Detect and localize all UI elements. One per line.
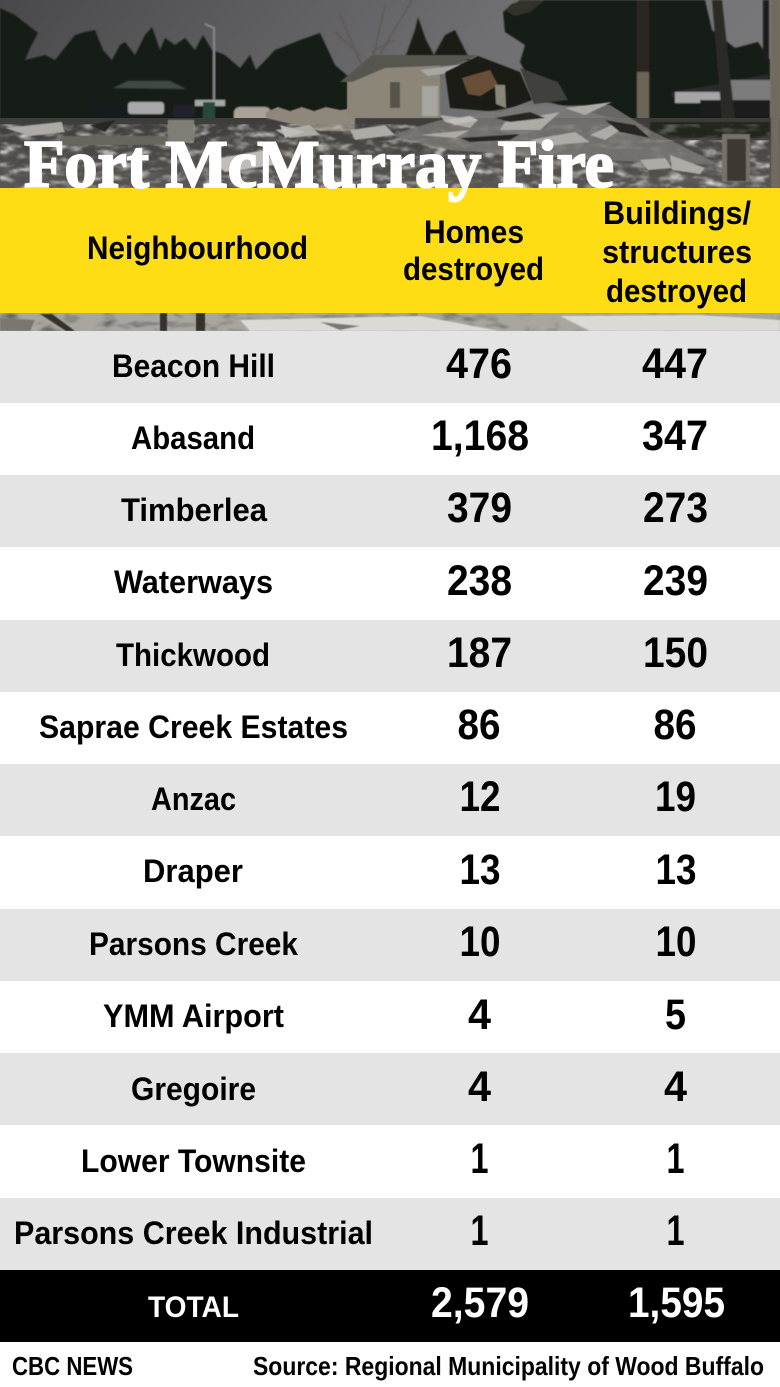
row: Parsons Creek Industrial: 1 (470, 1207, 488, 1255)
title: Fort McMurray Fire (24, 126, 614, 202)
row: Draper: 13 (460, 846, 500, 894)
column heading: buildings/structures destroyed (602, 195, 752, 309)
row: Thickwood: Thickwood (116, 637, 270, 673)
row: Gregoire: 4 (468, 1063, 491, 1111)
row: Anzac (0, 764, 780, 836)
row: Timberlea: 273 (643, 484, 708, 532)
house (340, 55, 568, 118)
small tree behind house (405, 17, 470, 62)
row: Timberlea: Timberlea (121, 492, 267, 528)
row: Draper: Draper (143, 853, 243, 889)
row: Gregoire: Gregoire (131, 1071, 256, 1107)
row: YMM Airport: 5 (665, 991, 686, 1039)
tree line (0, 8, 350, 122)
footer credit: CBC News: CBC NEWS (12, 1351, 133, 1381)
row: Gregoire: 4 (664, 1063, 687, 1111)
data table (0, 331, 780, 1270)
row: YMM Airport (0, 981, 780, 1053)
row: Timberlea (0, 475, 780, 547)
column heading: homes destroyed: Homes (424, 214, 524, 250)
row: Abasand: Abasand (131, 420, 255, 456)
row: Thickwood (0, 620, 780, 692)
row: Parsons Creek: 10 (656, 918, 696, 966)
row: Gregoire (0, 1053, 780, 1125)
column heading: homes destroyed (403, 214, 544, 287)
street lamp (205, 24, 214, 118)
row: Waterways: 238 (447, 557, 512, 605)
row: Thickwood: 187 (447, 629, 512, 677)
row: Anzac: Anzac (151, 781, 236, 817)
row: Abasand (0, 403, 780, 475)
column heading: buildings/structures destroyed: destroyed (606, 273, 747, 309)
row: Beacon Hill: 447 (642, 340, 708, 388)
small roof and cars (113, 81, 186, 89)
row: Lower Townsite (0, 1125, 780, 1198)
column heading: neighbourhood: Neighbourhood (87, 230, 308, 266)
debris texture (0, 124, 770, 190)
row: Lower Townsite: Lower Townsite (81, 1143, 306, 1179)
row: Beacon Hill: Beacon Hill (112, 348, 275, 384)
white house behind trees (672, 74, 768, 98)
row: Parsons Creek (0, 909, 780, 981)
ground (0, 118, 780, 190)
row: Parsons Creek Industrial: 1 (666, 1207, 684, 1255)
row: Thickwood: 150 (643, 629, 708, 677)
row: Lower Townsite: 1 (666, 1135, 684, 1183)
row: YMM Airport: YMM Airport (103, 998, 284, 1034)
row: Parsons Creek Industrial: Parsons Creek Industrial (14, 1215, 373, 1251)
trunks and pole (637, 0, 649, 72)
large trees at right (503, 0, 770, 125)
row: Lower Townsite: 1 (470, 1135, 488, 1183)
column heading: buildings/structures destroyed: Buildings/ (603, 195, 751, 231)
header background (0, 188, 780, 313)
row: Beacon Hill (0, 331, 780, 403)
background photo: destroyed house and debris (0, 0, 780, 331)
total row (0, 1270, 780, 1342)
row: Beacon Hill: 476 (446, 340, 512, 388)
row: Saprae Creek Estates (0, 692, 780, 764)
total row: 2,579 (431, 1279, 529, 1327)
row: Draper: 13 (656, 846, 696, 894)
row: Waterways (0, 547, 780, 620)
row: YMM Airport: 4 (468, 991, 491, 1039)
bare tree (335, 0, 412, 118)
row: Anzac: 19 (655, 773, 696, 821)
row: Abasand: 1,168 (431, 412, 529, 460)
row: Abasand: 347 (642, 412, 708, 460)
row: Saprae Creek Estates: 86 (654, 701, 696, 749)
column heading: homes destroyed: destroyed (403, 251, 544, 287)
fence (266, 107, 355, 131)
row: Timberlea: 379 (447, 484, 512, 532)
row: Waterways: Waterways (114, 564, 273, 600)
row: Anzac: 12 (460, 773, 500, 821)
lower photo strip (0, 313, 780, 331)
row: Saprae Creek Estates: Saprae Creek Estates (39, 709, 348, 745)
total row: TOTAL (148, 1291, 239, 1324)
row: Saprae Creek Estates: 86 (458, 701, 500, 749)
header band (0, 188, 780, 313)
row: Parsons Creek Industrial (0, 1198, 780, 1270)
row: Draper (0, 836, 780, 909)
row: Waterways: 239 (643, 557, 708, 605)
total row: 1,595 (628, 1279, 725, 1327)
column heading: buildings/structures destroyed: structures (602, 234, 752, 270)
row: Parsons Creek: Parsons Creek (89, 926, 298, 962)
row: Parsons Creek: 10 (460, 918, 500, 966)
debris pile (5, 0, 780, 188)
